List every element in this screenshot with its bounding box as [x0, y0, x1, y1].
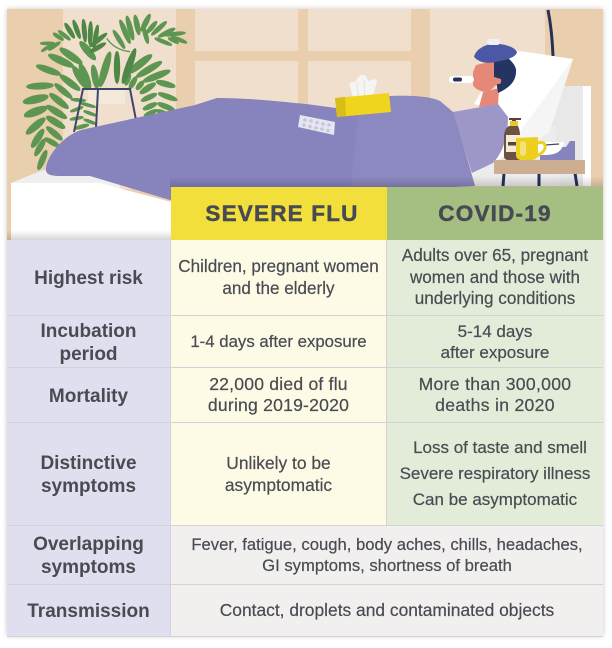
shadow cast by table header [7, 176, 603, 240]
bed frame and headboard [465, 86, 591, 186]
row label: transmission [7, 585, 170, 636]
flu: incubation: 1-4 days after exposure [190, 332, 367, 351]
illustration: patient sick in bed [7, 9, 603, 240]
row label: incubation period: Incubation [40, 320, 137, 342]
covid: distinctive symptoms: Can be asymptomatic [413, 490, 577, 509]
flu: incubation [171, 316, 386, 367]
icon: thermometer [449, 76, 474, 83]
drip stand pole [548, 10, 553, 56]
flu: mortality: 22,000 died of flu [209, 374, 348, 394]
shared: transmission [171, 585, 603, 636]
covid: highest risk: women and those with [410, 268, 580, 287]
icon: plant stand [74, 89, 136, 132]
covid: distinctive symptoms: Severe respiratory illness [400, 464, 590, 483]
bed sheet [11, 170, 175, 240]
row label: transmission: Transmission [27, 601, 150, 622]
collar [474, 92, 487, 106]
flu: mortality [171, 368, 386, 422]
shared: overlapping symptoms: GI symptoms, shortness of breath [262, 556, 512, 575]
row label: incubation period [7, 316, 170, 367]
flu: mortality: during 2019-2020 [208, 395, 349, 415]
flu: distinctive symptoms [171, 423, 386, 525]
covid: incubation: 5-14 days [458, 322, 532, 340]
patient [453, 58, 516, 173]
row label: distinctive symptoms [7, 423, 170, 525]
row label: highest risk [7, 240, 170, 315]
flu: highest risk [171, 240, 386, 315]
column header: covid-19 [387, 187, 603, 240]
hair [493, 58, 516, 93]
covid: incubation: after exposure [441, 342, 549, 362]
mug [516, 137, 538, 160]
icon: blister pack [298, 115, 335, 135]
blanket [46, 96, 475, 200]
flu: highest risk: Children, pregnant women [178, 256, 379, 276]
neck [479, 88, 499, 107]
icon: fern plant [22, 13, 187, 171]
icon: side table with items [494, 118, 585, 186]
icon: tissue box [335, 75, 391, 117]
row label: overlapping symptoms [7, 526, 170, 584]
row label: highest risk: Highest risk [34, 268, 143, 289]
row label: overlapping symptoms: Overlapping [33, 534, 144, 555]
covid: highest risk [387, 240, 603, 315]
covid: highest risk: Adults over 65, pregnant [402, 246, 588, 265]
covid: incubation [387, 316, 603, 367]
column header: severe flu: SEVERE FLU [205, 201, 359, 226]
column header: severe flu [171, 187, 387, 240]
shared: overlapping symptoms [171, 526, 603, 584]
face [473, 61, 501, 92]
covid: distinctive symptoms [387, 423, 603, 525]
flu: highest risk: and the elderly [222, 278, 335, 298]
row label: incubation period: period [59, 344, 118, 364]
covid: mortality [387, 368, 603, 422]
row label: mortality: Mortality [49, 386, 128, 406]
row label: mortality [7, 368, 170, 422]
flu: distinctive symptoms: asymptomatic [225, 475, 332, 495]
row label: distinctive symptoms: Distinctive [40, 453, 137, 474]
arm and shoulder [453, 104, 508, 173]
covid: distinctive symptoms: Loss of taste and smell [413, 438, 587, 457]
pillow [470, 50, 573, 173]
bottle [504, 126, 520, 160]
room wall [7, 9, 603, 241]
shared: overlapping symptoms: Fever, fatigue, cough, body aches, chills, headaches, [191, 535, 583, 554]
shared: transmission: Contact, droplets and contaminated objects [220, 600, 554, 620]
covid: highest risk: underlying conditions [415, 289, 575, 308]
covid: mortality: More than 300,000 [419, 374, 571, 394]
column header: covid-19: COVID-19 [438, 201, 552, 226]
covid: mortality: deaths in 2020 [435, 395, 555, 415]
flu: distinctive symptoms: Unlikely to be [226, 453, 331, 473]
row label: distinctive symptoms: symptoms [41, 476, 136, 497]
row label: overlapping symptoms: symptoms [41, 557, 136, 578]
icon: ice pack [474, 39, 517, 63]
